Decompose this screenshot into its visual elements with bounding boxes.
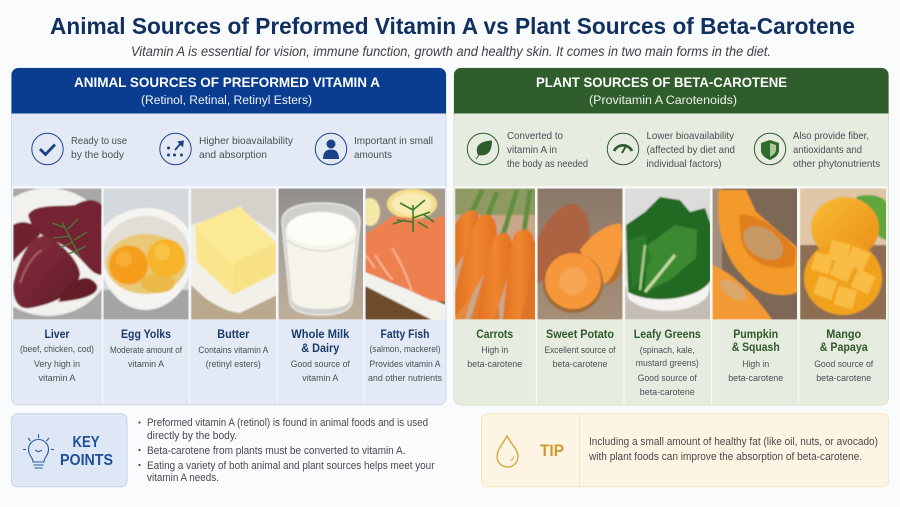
label: fatty fish: [368, 328, 442, 383]
label: sweet potato: [544, 328, 616, 369]
label: sweet potato: Excellent source of: [544, 345, 616, 355]
plant header: PLANT SOURCES OF BETA-CAROTENE: [536, 74, 787, 90]
animal header: [12, 68, 446, 114]
feature: higher bioavailability: [160, 133, 294, 165]
label: whole milk and dairy: & Dairy: [301, 342, 340, 355]
key points label: [60, 434, 113, 469]
plant header: [454, 68, 888, 114]
feature: ready to use: by the body: [71, 150, 125, 161]
label: liver: Very high in: [34, 359, 80, 369]
key points box: [12, 414, 127, 487]
icon: light bulb: [23, 434, 54, 468]
label: carrots: [467, 328, 522, 369]
label: leafy greens: Leafy Greens: [634, 328, 701, 341]
label: whole milk and dairy: [291, 328, 350, 383]
photo strip frame: [12, 186, 446, 320]
tip text: Including a small amount of healthy fat (like oil, nuts, or avocado): [589, 436, 878, 448]
label: pumpkin and squash: [728, 328, 783, 383]
feature: ready to use: [32, 133, 127, 165]
key points list: [138, 417, 435, 484]
label: mango and papaya: beta-carotene: [816, 373, 871, 383]
panel body: [12, 68, 446, 405]
label: sweet potato: beta-carotene: [552, 359, 608, 369]
photo: milk: [278, 188, 364, 320]
label: whole milk and dairy: vitamin A: [302, 373, 339, 383]
label: whole milk and dairy: Good source of: [291, 359, 350, 369]
label: pumpkin and squash: High in: [742, 359, 769, 369]
label: mango and papaya: [814, 328, 874, 383]
feature: also provide fiber: antioxidants and: [793, 145, 862, 156]
photo: fatty fish: [360, 188, 446, 320]
feature: lower bioavailability: individual factors): [646, 159, 722, 170]
label: liver: vitamin A: [38, 373, 76, 383]
labels separators: [102, 320, 364, 404]
key points list: directly by the body.: [147, 430, 237, 442]
label: carrots: High in: [481, 345, 508, 355]
label: carrots: Carrots: [476, 328, 513, 341]
label: mango and papaya: Mango: [826, 328, 861, 341]
plant header: (Provitamin A Carotenoids): [589, 93, 737, 107]
label: mango and papaya: Good source of: [814, 359, 874, 369]
feature: ready to use: Ready to use: [71, 136, 127, 147]
feature: lower bioavailability: (affected by diet and: [646, 145, 735, 156]
label: fatty fish: and other nutrients: [368, 373, 442, 383]
plant labels separators: [536, 320, 798, 404]
label: leafy greens: mustard greens): [636, 358, 699, 368]
feature: higher bioavailability: Higher bioavailability: [199, 136, 294, 147]
photo: mango and papaya: [800, 188, 887, 320]
feature: also provide fiber: [754, 131, 880, 170]
feature: important in small amounts: [315, 133, 433, 165]
feature: converted to vitamin A: Converted to: [507, 131, 563, 142]
plant photo strip frame: [454, 186, 888, 320]
plant panel body: [454, 68, 888, 405]
key points label: POINTS: [60, 452, 113, 469]
tip text: [588, 436, 878, 463]
label: liver: (beef, chicken, cod): [20, 344, 94, 354]
feature: converted to vitamin A: the body as needed: [507, 159, 588, 170]
feature: converted to vitamin A: vitamin A in: [507, 145, 557, 156]
label: sweet potato: Sweet Potato: [546, 328, 614, 341]
photo: sweet potato: [537, 188, 623, 320]
feature: lower bioavailability: [607, 131, 735, 170]
label: butter: (retinyl esters): [206, 359, 261, 369]
photo: butter: [191, 188, 277, 320]
feature: higher bioavailability: and absorption: [199, 150, 267, 161]
key points list: Preformed vitamin A (retinol) is found in animal foods and is used: [147, 417, 428, 429]
key points list: Beta-carotene from plants must be converted to vitamin A.: [147, 445, 406, 457]
label: leafy greens: [634, 328, 701, 397]
label: butter: Contains vitamin A: [198, 345, 269, 355]
label: egg yolks: vitamin A: [128, 359, 165, 369]
key points label: KEY: [72, 434, 100, 451]
photo: pumpkin and squash: [712, 188, 798, 320]
tip text: with plant foods can improve the absorption of beta-carotene.: [588, 451, 862, 463]
tip label: TIP: [540, 442, 564, 460]
label: fatty fish: (salmon, mackerel): [370, 344, 440, 354]
icon: oil drop: [497, 436, 518, 467]
title: Animal Sources of Preformed Vitamin A vs Plant Sources of Beta-Carotene: [50, 13, 855, 39]
label: egg yolks: Moderate amount of: [110, 345, 182, 355]
animal header: ANIMAL SOURCES OF PREFORMED VITAMIN A: [74, 74, 380, 90]
label: fatty fish: Fatty Fish: [380, 328, 430, 341]
label: fatty fish: Provides vitamin A: [370, 359, 441, 369]
photo: egg yolks: [104, 188, 188, 320]
label: leafy greens: (spinach, kale,: [640, 345, 695, 355]
label: pumpkin and squash: beta-carotene: [728, 373, 783, 383]
subtitle: Vitamin A is essential for vision, immune function, growth and healthy skin. It comes in two main forms in the diet.: [131, 44, 771, 59]
photo: leafy greens: [625, 188, 711, 320]
label: liver: Liver: [44, 328, 70, 341]
label: butter: Butter: [217, 328, 250, 341]
tip box: [482, 414, 888, 487]
label: mango and papaya: & Papaya: [820, 341, 868, 354]
label: liver: [20, 328, 94, 383]
feature: also provide fiber: other phytonutrients: [793, 159, 880, 170]
label: pumpkin and squash: & Squash: [732, 341, 780, 354]
label: egg yolks: [110, 328, 182, 369]
key points list: vitamin A needs.: [147, 472, 219, 484]
label: butter: [198, 328, 269, 369]
label: leafy greens: beta-carotene: [640, 387, 695, 397]
panel: plant sources: [454, 68, 888, 405]
photo: liver: [13, 188, 102, 320]
label: leafy greens: Good source of: [638, 373, 697, 383]
feature: also provide fiber: Also provide fiber,: [793, 131, 869, 142]
animal header: (Retinol, Retinal, Retinyl Esters): [141, 93, 312, 107]
feature: important in small amounts: amounts: [354, 150, 392, 161]
feature: converted to vitamin A: [467, 131, 588, 170]
photo: carrots: [455, 188, 536, 320]
label: whole milk and dairy: Whole Milk: [291, 328, 350, 341]
feature: important in small amounts: Important in small: [354, 136, 433, 147]
key points list: Eating a variety of both animal and plant sources helps meet your: [147, 460, 435, 472]
label: egg yolks: Egg Yolks: [121, 328, 171, 341]
feature: lower bioavailability: Lower bioavailability: [646, 131, 735, 142]
panel: animal sources: [0, 68, 446, 405]
label: pumpkin and squash: Pumpkin: [733, 328, 778, 341]
label: carrots: beta-carotene: [467, 359, 522, 369]
